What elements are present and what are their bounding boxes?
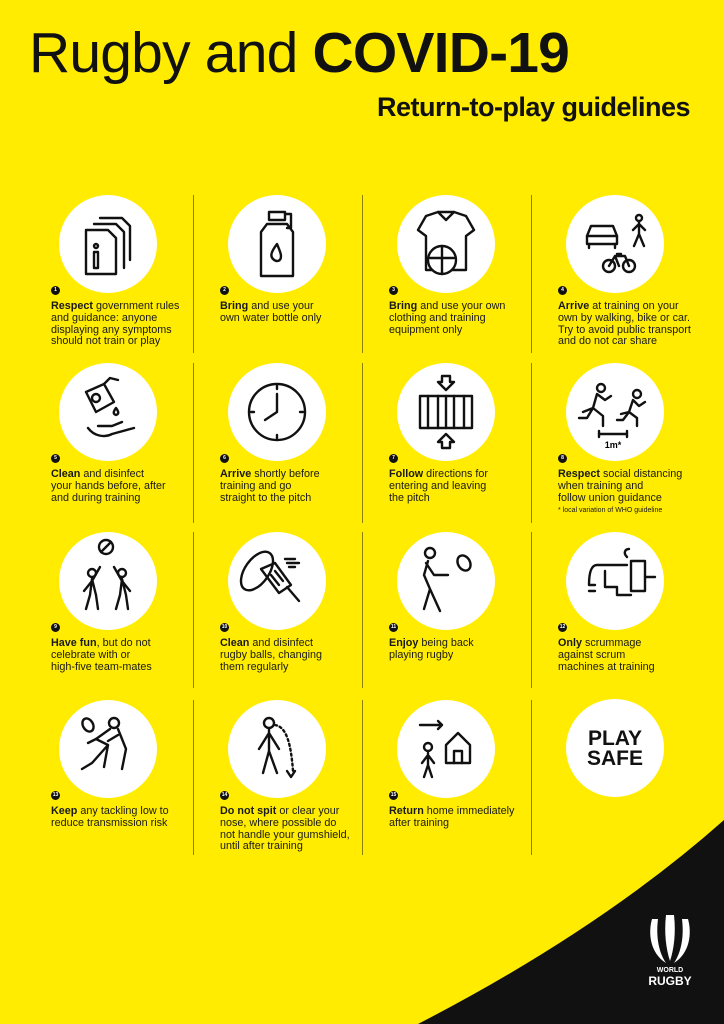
icon: no spitting bbox=[227, 699, 327, 799]
text 8: when training and bbox=[558, 480, 643, 492]
text 3: equipment only bbox=[389, 324, 462, 336]
badge 15 bbox=[389, 791, 398, 800]
panel 11 bbox=[389, 532, 495, 661]
text 7: the pitch bbox=[389, 492, 430, 504]
badge 9 bbox=[51, 623, 60, 632]
text 14 bbox=[220, 806, 350, 853]
text 4: and do not car share bbox=[558, 335, 657, 347]
text 14: not handle your gumshield, bbox=[220, 829, 350, 841]
text 6 bbox=[220, 468, 320, 504]
icon: bottle bbox=[228, 195, 326, 293]
badge 7 bbox=[389, 454, 398, 463]
dividers bbox=[193, 195, 194, 353]
text 15: after training bbox=[389, 817, 449, 829]
logo: World Rugby: WORLD bbox=[657, 967, 683, 974]
panel 9 bbox=[51, 532, 157, 673]
text 9: high-five team-mates bbox=[51, 661, 152, 673]
badge 10: 10 bbox=[222, 624, 227, 630]
panel 4 bbox=[558, 195, 691, 347]
badge 15: 15 bbox=[391, 792, 396, 798]
badge 1: 1 bbox=[54, 287, 57, 293]
text 3 bbox=[389, 300, 505, 336]
text 10: them regularly bbox=[220, 661, 288, 673]
badge 2: 2 bbox=[223, 287, 226, 293]
text 8: follow union guidance bbox=[558, 492, 662, 504]
text 15: Return home immediately bbox=[389, 805, 514, 817]
text 10 bbox=[220, 637, 322, 673]
icon: sanitiser hand bbox=[59, 363, 157, 461]
badge 4: 4 bbox=[561, 287, 564, 293]
text 5: and during training bbox=[51, 492, 140, 504]
badge 12: 12 bbox=[560, 624, 565, 630]
text 7 bbox=[389, 468, 488, 504]
text 3: clothing and training bbox=[389, 312, 486, 324]
subtitle: Return-to-play guidelines bbox=[377, 92, 690, 122]
badge 3 bbox=[389, 286, 398, 295]
play safe badge bbox=[566, 699, 664, 797]
text 13 bbox=[51, 805, 169, 829]
play safe badge: SAFE bbox=[587, 747, 643, 770]
icon: clock bbox=[228, 363, 326, 461]
badge 11: 11 bbox=[391, 624, 396, 630]
text 14: nose, where possible do bbox=[220, 817, 336, 829]
panel 6 bbox=[220, 363, 326, 504]
badge 3: 3 bbox=[392, 287, 395, 293]
badge 13 bbox=[51, 791, 60, 800]
text 10: rugby balls, changing bbox=[220, 649, 322, 661]
panel 15 bbox=[389, 699, 529, 859]
icon: pitch arrows bbox=[397, 363, 495, 461]
text 6: training and go bbox=[220, 480, 291, 492]
badge 8 bbox=[558, 454, 567, 463]
text 12 bbox=[558, 637, 655, 673]
icon: clean ball bbox=[228, 532, 326, 630]
badge 7: 7 bbox=[392, 455, 395, 461]
text 10: Clean and disinfect bbox=[220, 637, 313, 649]
badge 12 bbox=[558, 623, 567, 632]
text 11 bbox=[389, 637, 474, 661]
logo: World Rugby bbox=[640, 915, 700, 1000]
icon: runners 1m bbox=[566, 363, 664, 461]
text 8: * local variation of WHO guideline bbox=[558, 507, 662, 514]
text 9 bbox=[51, 637, 152, 673]
panel 3 bbox=[389, 195, 505, 336]
text 7: Follow directions for bbox=[389, 468, 488, 480]
panel 2 bbox=[220, 195, 326, 324]
text 11: playing rugby bbox=[389, 649, 453, 661]
badge 6: 6 bbox=[223, 455, 226, 461]
text 8 bbox=[558, 468, 682, 514]
text 1: and guidance: anyone bbox=[51, 312, 157, 324]
text 4 bbox=[558, 300, 691, 347]
text 1: should not train or play bbox=[51, 335, 160, 347]
text 12: Only scrummage bbox=[558, 637, 641, 649]
text 13: reduce transmission risk bbox=[51, 817, 167, 829]
text 13: Keep any tackling low to bbox=[51, 805, 169, 817]
icon: shirt and headgear bbox=[397, 195, 495, 293]
text 5: Clean and disinfect bbox=[51, 468, 144, 480]
panel 13 bbox=[51, 700, 169, 829]
text 6: straight to the pitch bbox=[220, 492, 311, 504]
icon: car walker bike bbox=[566, 195, 664, 293]
text 9: celebrate with or bbox=[51, 649, 130, 661]
badge 10 bbox=[220, 623, 229, 632]
text 4: own by walking, bike or car. bbox=[558, 312, 690, 324]
text 2: Bring and use your bbox=[220, 300, 314, 312]
text 5: your hands before, after bbox=[51, 480, 166, 492]
badge 9: 9 bbox=[54, 624, 57, 630]
badge 4 bbox=[558, 286, 567, 295]
badge 1 bbox=[51, 286, 60, 295]
text 3: Bring and use your own bbox=[389, 300, 505, 312]
text 1 bbox=[51, 300, 179, 347]
icon: documents bbox=[59, 195, 157, 293]
panel 12 bbox=[558, 532, 664, 673]
text 15 bbox=[389, 806, 514, 830]
text 11: Enjoy being back bbox=[389, 637, 474, 649]
play safe badge: PLAY bbox=[588, 727, 642, 750]
badge 13: 13 bbox=[53, 792, 58, 798]
text 14: Do not spit or clear your bbox=[220, 805, 339, 817]
title: Rugby and COVID-19 bbox=[29, 21, 569, 85]
badge 5: 5 bbox=[54, 455, 57, 461]
panel 5 bbox=[51, 363, 166, 504]
text 12: machines at training bbox=[558, 661, 655, 673]
text 1: displaying any symptoms bbox=[51, 324, 172, 336]
badge 14 bbox=[220, 791, 229, 800]
text 2 bbox=[220, 300, 322, 324]
icon: walk home bbox=[396, 699, 496, 799]
icon: no high five bbox=[59, 532, 157, 630]
icon: player passing bbox=[397, 532, 495, 630]
text 12: against scrum bbox=[558, 649, 625, 661]
text 14: until after training bbox=[220, 840, 303, 852]
logo: World Rugby: RUGBY bbox=[648, 974, 692, 988]
text 4: Arrive at training on your bbox=[558, 300, 679, 312]
panel 1 bbox=[51, 195, 179, 347]
badge 8: 8 bbox=[561, 455, 564, 461]
text 9: Have fun, but do not bbox=[51, 637, 151, 649]
text 2: own water bottle only bbox=[220, 312, 321, 324]
badge 5 bbox=[51, 454, 60, 463]
icon: tackle bbox=[59, 700, 157, 798]
panel 14 bbox=[220, 699, 360, 859]
panel 8 bbox=[558, 363, 682, 514]
badge 14: 14 bbox=[222, 792, 227, 798]
text 7: entering and leaving bbox=[389, 480, 486, 492]
panel 10 bbox=[220, 532, 326, 673]
badge 2 bbox=[220, 286, 229, 295]
icon: runners 1m: 1m* bbox=[605, 440, 622, 450]
badge 6 bbox=[220, 454, 229, 463]
text 1: Respect government rules bbox=[51, 300, 179, 312]
icon: scrum machine bbox=[566, 532, 664, 630]
panel 7 bbox=[389, 363, 495, 504]
text 5 bbox=[51, 468, 166, 504]
badge 11 bbox=[389, 623, 398, 632]
text 6: Arrive shortly before bbox=[220, 468, 320, 480]
text 8: Respect social distancing bbox=[558, 468, 682, 480]
text 4: Try to avoid public transport bbox=[558, 324, 691, 336]
